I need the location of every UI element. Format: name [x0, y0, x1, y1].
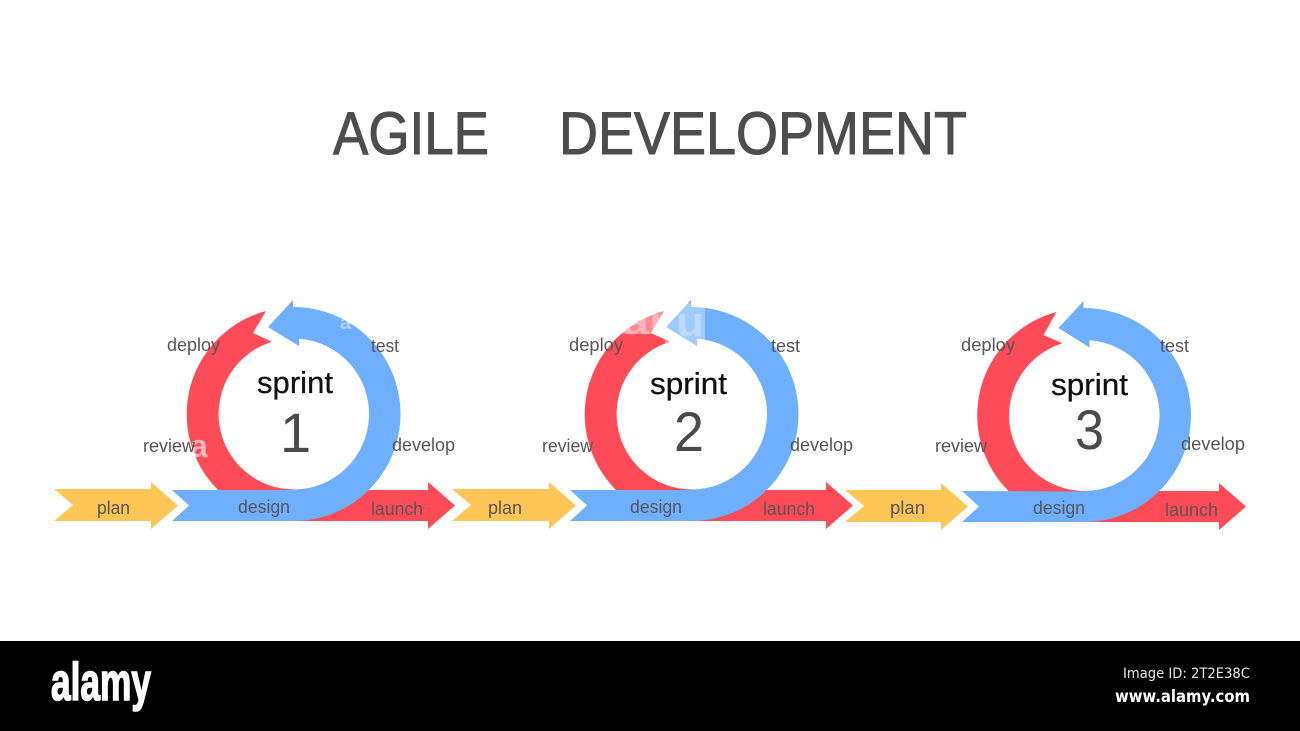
arrow: red deploy and launch loop 1 [187, 311, 455, 529]
arrow: red deploy and launch loop 2 [585, 311, 853, 529]
arrow: blue design and test loop 2 [570, 300, 799, 521]
panel: sprint 2 [452, 298, 853, 529]
watermark fragments 2: u [676, 298, 704, 345]
labels sprint 1: test [371, 336, 399, 356]
panel: sprint 3 [845, 301, 1246, 530]
labels sprint 2: launch [763, 499, 815, 519]
labels sprint 3: review [935, 436, 988, 456]
arrow: red deploy and launch loop 3 [977, 312, 1246, 530]
footer bar [0, 641, 1300, 731]
arrow: blue design and test loop 3 [962, 301, 1191, 522]
labels sprint 2: deploy [569, 335, 623, 355]
labels sprint 1: sprint [257, 365, 333, 400]
panel: sprint 1 [54, 300, 455, 529]
labels sprint 3: deploy [961, 335, 1015, 355]
website: www.alamy.com [1115, 687, 1250, 707]
labels sprint 1 [143, 335, 455, 519]
labels sprint 1: launch [371, 499, 423, 519]
labels sprint 1: develop [392, 435, 455, 455]
labels sprint 1: review [143, 436, 196, 456]
labels sprint 3: sprint [1051, 367, 1128, 402]
arrow: plan 1: plan [97, 498, 130, 518]
arrow: plan 1 [54, 482, 178, 529]
watermark fragments 1: a [190, 428, 208, 464]
watermark fragments 1 [190, 312, 352, 464]
labels sprint 2: develop [790, 435, 853, 455]
title: AGILE [333, 100, 489, 167]
title: DEVELOPMENT [559, 100, 967, 167]
labels sprint 3: design [1033, 498, 1085, 518]
labels sprint 3: develop [1181, 434, 1245, 454]
labels sprint 2: test [771, 336, 800, 356]
labels sprint 3: 3 [1075, 398, 1104, 461]
arrow: plan 2 [452, 482, 576, 529]
labels sprint 3: test [1160, 336, 1189, 356]
labels sprint 1: deploy [167, 335, 220, 355]
arrow: plan 2: plan [488, 498, 522, 518]
watermark fragments 1: a [340, 312, 352, 334]
labels sprint 2: sprint [650, 366, 727, 401]
arrow: plan 3: plan [890, 498, 925, 518]
arrow: blue design and test loop 1 [172, 300, 401, 521]
title [333, 100, 967, 167]
labels sprint 3: launch [1165, 500, 1218, 520]
arrow: plan 3 [845, 483, 968, 530]
watermark fragments 2: ar [622, 301, 668, 343]
watermark fragments 2 [622, 298, 705, 346]
image id: Image ID: 2T2E38C [1123, 666, 1250, 682]
labels sprint 2: design [630, 497, 682, 517]
labels sprint 3 [935, 335, 1245, 520]
labels sprint 2 [542, 335, 853, 519]
labels sprint 2: review [542, 436, 594, 456]
labels sprint 1: 1 [280, 401, 311, 464]
labels sprint 1: design [238, 497, 290, 517]
labels sprint 2: 2 [674, 400, 704, 463]
logo: alamy: alamy [51, 653, 151, 712]
